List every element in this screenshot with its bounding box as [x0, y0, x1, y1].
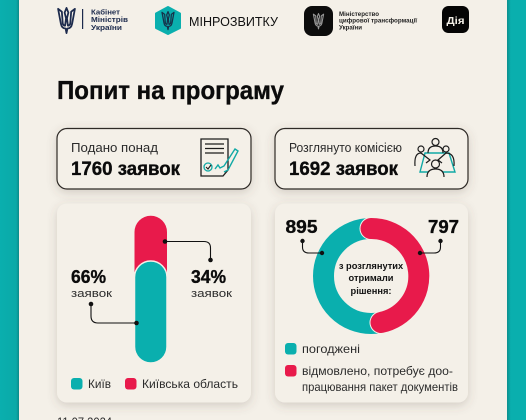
label: 34% заявок: 34%: [191, 267, 226, 287]
capsule bar chart: [134, 216, 167, 363]
legend: працювання пакет документів: [302, 380, 458, 394]
title: Попит на програму: [57, 75, 284, 105]
label: 66% заявок: [71, 267, 112, 300]
legend: Київ: [88, 377, 111, 391]
legend: погоджені: [302, 342, 360, 356]
logo: Кабінет Міністрів України: Кабінет: [91, 8, 121, 16]
label: 66% заявок: 66%: [71, 267, 106, 287]
logo: Міністерство цифрової трансформації України: [304, 6, 417, 36]
icon: signed document: [201, 139, 238, 176]
donut centre text: отримали: [349, 273, 394, 283]
callout: 895 leader: [302, 241, 322, 253]
label: 66% заявок: заявок: [71, 288, 112, 300]
stat card: submitted applications: [57, 128, 251, 189]
callout: 797 leader: [420, 241, 440, 253]
value: 895: 895: [286, 216, 318, 237]
logo: Мінрозвитку: [156, 7, 278, 34]
stat card: reviewed applications: Розглянуто комісією: [289, 140, 402, 155]
panel: decisions: [275, 204, 468, 402]
logo: Кабінет Міністрів України: України: [91, 23, 122, 32]
donut chart: [324, 228, 419, 324]
left teal side band: [0, 0, 19, 420]
panel: Kyiv vs region: [57, 204, 251, 402]
label: 34% заявок: [191, 267, 232, 300]
right teal side band: [507, 0, 526, 420]
donut centre text: рішення:: [351, 286, 391, 296]
donut centre text: з розглянутих: [339, 261, 404, 271]
logo: Дія: [442, 6, 469, 33]
stat card: submitted applications: 1760 заявок: [71, 159, 180, 180]
stat card: reviewed applications: [275, 128, 468, 189]
stat card: reviewed applications: 1692 заявок: [289, 159, 398, 180]
icon: committee meeting: [415, 138, 455, 177]
legend: [71, 377, 238, 391]
callout: 34% leader: [165, 242, 210, 260]
legend: [285, 342, 458, 394]
logo: Міністерство цифрової трансформації України: Міністерство: [339, 12, 379, 18]
logo: Кабінет Міністрів України: Міністрів: [91, 15, 129, 24]
logo: Міністерство цифрової трансформації України: цифрової трансформації: [339, 18, 417, 24]
stat card: submitted applications: Подано понад: [71, 140, 158, 155]
logo: Кабінет Міністрів України: [58, 8, 129, 33]
value: 797: 797: [428, 216, 459, 237]
legend: Київська область: [142, 377, 238, 391]
legend: відмовлено, потребує доо-: [302, 364, 453, 378]
logo: Дія: Дія: [446, 16, 465, 27]
logo: Мінрозвитку: МІНРОЗВИТКУ: [189, 15, 278, 29]
callout: 66% leader: [91, 304, 136, 323]
label: 34% заявок: заявок: [191, 288, 232, 300]
logo: Міністерство цифрової трансформації України: України: [339, 26, 362, 32]
